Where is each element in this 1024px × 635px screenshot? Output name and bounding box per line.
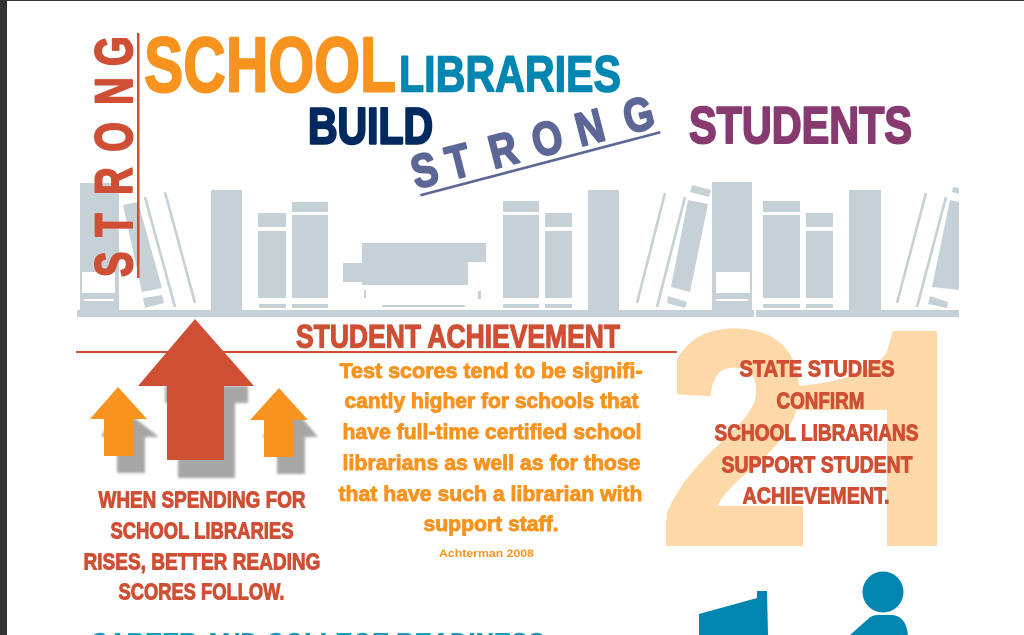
text block: state studies [714,356,918,508]
arrow: right orange [250,388,308,457]
big numeral 21 [666,328,937,546]
text block: spending: SCHOOL LIBRARIES [110,518,294,544]
title word: SCHOOL: SCHOOL [144,20,396,108]
title word: diagonal STRONG: STRONG [406,86,660,200]
text block: state studies: SCHOOL LIBRARIANS [714,420,918,446]
title word: LIBRARIES: LIBRARIES [399,46,621,102]
text block: test scores: librarians as well as for those [342,451,641,475]
text block: state studies: CONFIRM [776,388,864,414]
arrow: center red [138,319,254,460]
text block: test scores: that have such a librarian with [338,482,642,506]
text block: state studies: ACHIEVEMENT. [742,482,890,508]
title word: BUILD: BUILD [308,98,433,154]
text block: state studies: STATE STUDIES [740,356,894,382]
text block: test scores: Test scores tend to be signifi- [340,359,642,383]
text block: spending: RISES, BETTER READING [84,548,320,574]
heading: student achievement: STUDENT ACHIEVEMENT [296,318,620,354]
title word: STUDENTS: STUDENTS [689,97,912,155]
text block: spending: SCORES FOLLOW. [118,578,284,604]
text block: test scores: have full-time certified school [342,420,642,444]
text block: spending [84,486,320,604]
section rule [76,351,677,353]
citation: Achterman 2008 [439,548,534,560]
icon: rising arrows [90,319,318,478]
icon: person [850,572,908,635]
icon: book [699,591,768,635]
text block: test scores: support staff. [424,512,558,536]
text block: spending: WHEN SPENDING FOR [98,486,306,512]
title word: vertical STRONG: STRONG [84,36,143,277]
text block: state studies: SUPPORT STUDENT [722,452,913,478]
text block: test scores: cantly higher for schools that [344,389,638,413]
bookshelf illustration [77,182,959,317]
text block: test scores [338,359,642,536]
big numeral 21: 2 [660,270,810,608]
big numeral 21: 1 [817,269,987,612]
title [84,20,912,278]
arrow: left orange [90,387,147,456]
